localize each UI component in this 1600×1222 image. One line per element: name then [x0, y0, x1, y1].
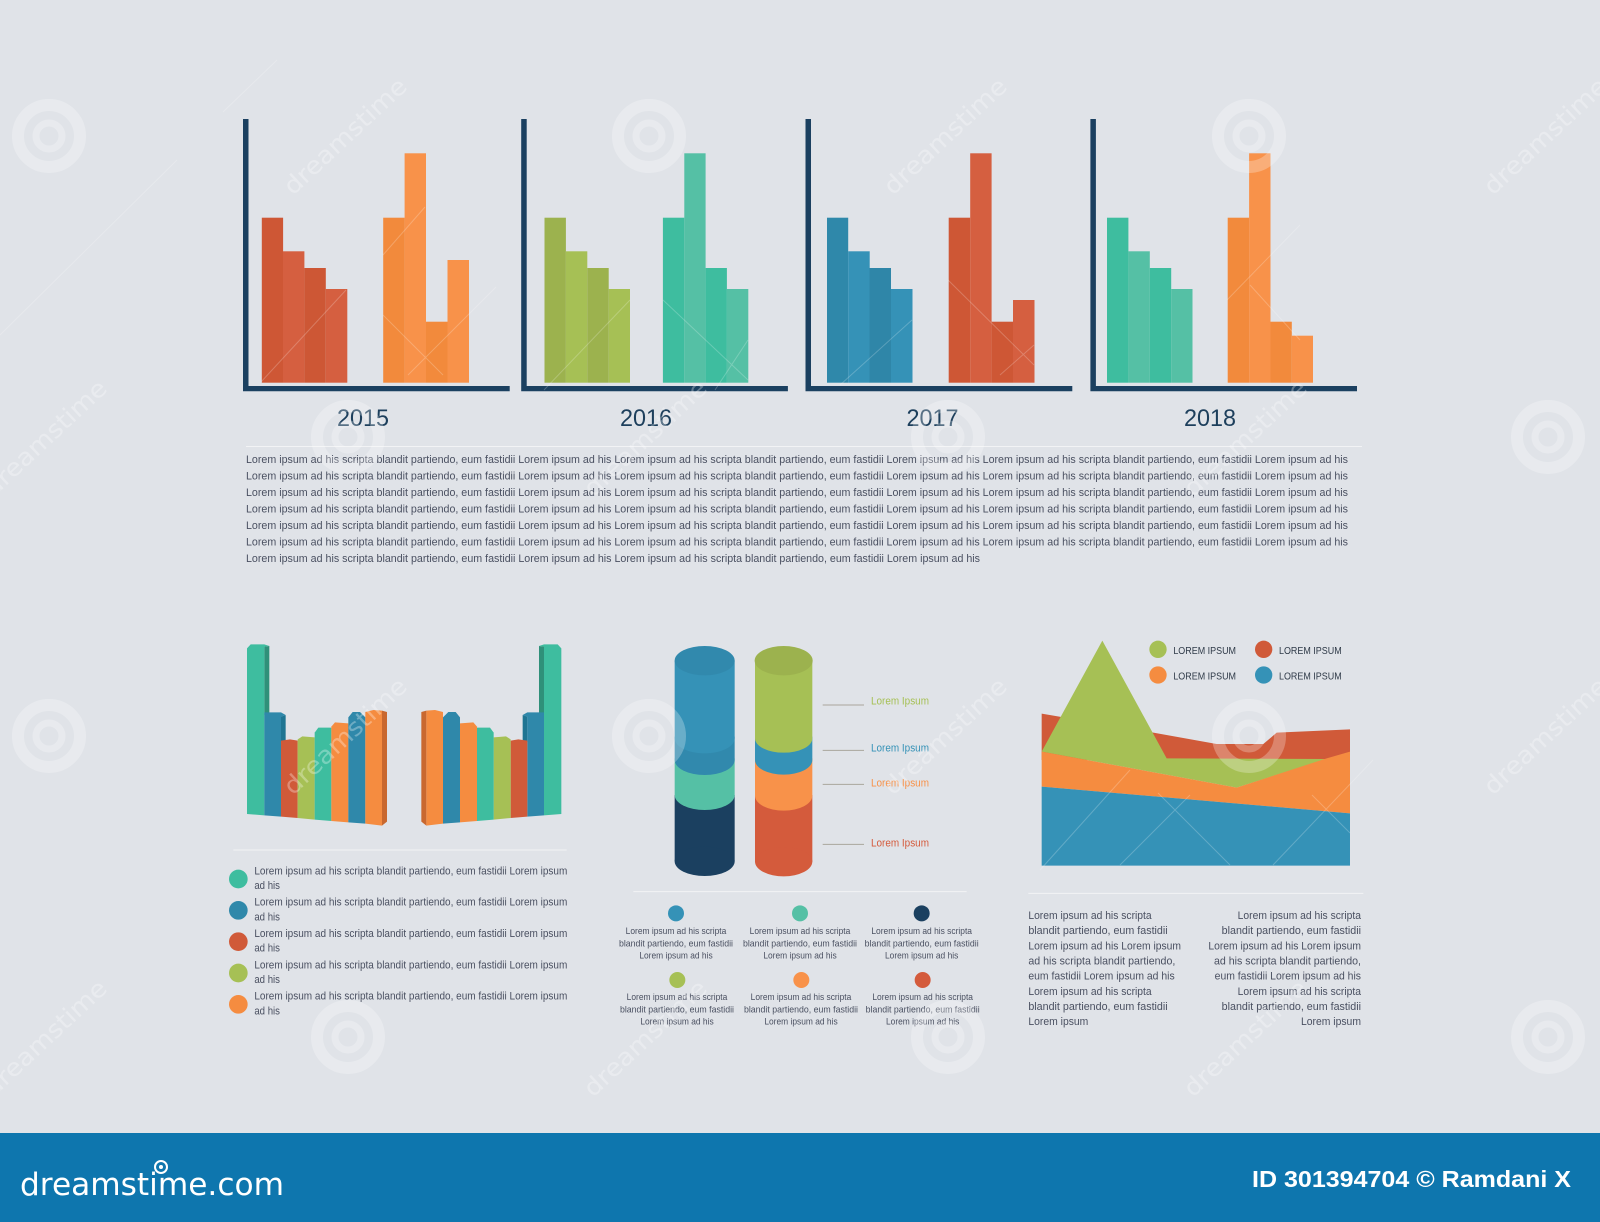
bars 2015 group two — [383, 153, 469, 383]
legend: cylinder items: blandit partiendo, eum fastidii — [865, 938, 979, 948]
area chart legend: LOREM IPSUM — [1173, 671, 1236, 682]
area chart legend — [1149, 641, 1342, 684]
legend: 3D bars: ad his — [254, 974, 280, 986]
left cylinder stack — [675, 646, 735, 876]
text block: main paragraph: Lorem ipsum ad his scripta blandit partiendo, eum fastidii Lorem ipsum ad his Lorem ipsum ad his scripta blandit partiendo, eum fastidii Lorem ipsum ad his Lorem ipsum ad his scripta blandit partiendo, eum fastidii Lorem ipsum ad his — [246, 520, 1348, 532]
text block: main paragraph: Lorem ipsum ad his scripta blandit partiendo, eum fastidii Lorem ipsum ad his Lorem ipsum ad his scripta blandit partiendo, eum fastidii Lorem ipsum ad his — [246, 553, 980, 565]
legend: cylinder items: Lorem ipsum ad his — [885, 951, 959, 961]
text block: right column: ad his scripta blandit partiendo, — [1214, 956, 1361, 968]
callout: red label: Lorem Ipsum — [871, 837, 929, 849]
text block: left column: Lorem ipsum ad his scripta — [1028, 986, 1152, 998]
text block: left column: blandit partiendo, eum fastidii — [1028, 925, 1168, 937]
bars 2018 group one — [1107, 218, 1192, 383]
text block: left column — [1028, 910, 1181, 1028]
text block: left column: Lorem ipsum ad his Lorem ipsum — [1028, 940, 1181, 952]
bars 2017 group two — [949, 153, 1034, 383]
watermark overlay: dreamstime — [1178, 374, 1313, 502]
legend: cylinder items: Lorem ipsum ad his scripta — [750, 926, 851, 936]
text block: main paragraph: Lorem ipsum ad his scripta blandit partiendo, eum fastidii Lorem ipsum ad his Lorem ipsum ad his scripta blandit partiendo, eum fastidii Lorem ipsum ad his Lorem ipsum ad his scripta blandit partiendo, eum fastidii Lorem ipsum ad his — [246, 454, 1348, 466]
text block: left column: blandit partiendo, eum fastidii — [1028, 1001, 1168, 1013]
legend: cylinder items — [619, 905, 980, 1027]
footer credit: ID 301394704 © Ramdani X — [1252, 1166, 1572, 1192]
callout: green label — [823, 695, 929, 707]
legend: 3D bars — [229, 865, 567, 1017]
legend: cylinder items: blandit partiendo, eum fastidii — [744, 1004, 858, 1014]
legend: cylinder items: Lorem ipsum ad his — [639, 951, 713, 961]
legend: 3D bars: Lorem ipsum ad his scripta blandit partiendo, eum fastidii Lorem ipsum — [254, 928, 567, 940]
footer bar — [0, 1133, 1600, 1222]
panel: stacked cylinder chart — [619, 646, 980, 1027]
legend: cylinder items: Lorem ipsum ad his — [640, 1017, 714, 1027]
area chart legend: LOREM IPSUM — [1279, 671, 1342, 682]
text block: main paragraph: Lorem ipsum ad his scripta blandit partiendo, eum fastidii Lorem ipsum ad his Lorem ipsum ad his scripta blandit partiendo, eum fastidii Lorem ipsum ad his Lorem ipsum ad his scripta blandit partiendo, eum fastidii Lorem ipsum ad his — [246, 536, 1348, 548]
text block: left column: ad his scripta blandit partiendo, — [1028, 956, 1175, 968]
watermark overlay: dreamstime — [278, 72, 413, 200]
legend: cylinder items: Lorem ipsum ad his — [763, 951, 837, 961]
legend: 3D bars: Lorem ipsum ad his scripta blandit partiendo, eum fastidii Lorem ipsum — [254, 897, 567, 909]
legend: 3D bars: ad his — [254, 911, 280, 923]
panel: bar chart 2018 — [1090, 119, 1357, 432]
legend: cylinder items: Lorem ipsum ad his scripta — [751, 992, 852, 1002]
area chart legend: LOREM IPSUM — [1279, 646, 1342, 657]
legend: cylinder items: Lorem ipsum ad his scripta — [871, 926, 973, 936]
year label 2017: 2017 — [906, 405, 958, 432]
axes 2016 — [521, 119, 788, 391]
watermark overlay: dreamstime — [878, 72, 1013, 200]
axes 2017 — [806, 119, 1072, 391]
legend: cylinder items: blandit partiendo, eum fastidii — [743, 938, 857, 948]
watermark overlay: dreamstime — [1178, 974, 1313, 1102]
legend: 3D bars: Lorem ipsum ad his scripta blandit partiendo, eum fastidii Lorem ipsum — [254, 865, 567, 877]
legend: 3D bars: ad his — [254, 880, 280, 892]
watermark overlay: dreamstime — [578, 374, 713, 502]
text block: right column: Lorem ipsum ad his scripta — [1238, 986, 1361, 998]
year label 2015: 2015 — [337, 405, 389, 432]
panel: bar chart 2017 — [806, 119, 1072, 432]
callout: green label: Lorem Ipsum — [871, 695, 929, 707]
text block: main paragraph: Lorem ipsum ad his scripta blandit partiendo, eum fastidii Lorem ipsum ad his Lorem ipsum ad his scripta blandit partiendo, eum fastidii Lorem ipsum ad his Lorem ipsum ad his scripta blandit partiendo, eum fastidii Lorem ipsum ad his — [246, 487, 1348, 499]
legend: cylinder items: Lorem ipsum ad his scripta — [872, 992, 974, 1002]
legend: cylinder items: Lorem ipsum ad his scripta — [627, 992, 728, 1002]
bars 2017 group one — [827, 218, 912, 383]
area chart shapes — [1042, 641, 1350, 866]
legend: cylinder items: blandit partiendo, eum fastidii — [866, 1004, 980, 1014]
text block: main paragraph: Lorem ipsum ad his scripta blandit partiendo, eum fastidii Lorem ipsum ad his Lorem ipsum ad his scripta blandit partiendo, eum fastidii Lorem ipsum ad his Lorem ipsum ad his scripta blandit partiendo, eum fastidii Lorem ipsum ad his — [246, 504, 1348, 516]
legend: 3D bars: Lorem ipsum ad his scripta blandit partiendo, eum fastidii Lorem ipsum — [254, 959, 567, 971]
panel: bar chart 2016 — [521, 119, 788, 432]
text block: left column: Lorem ipsum — [1028, 1016, 1088, 1028]
text block: right column: blandit partiendo, eum fastidii — [1222, 925, 1361, 937]
text block: right column: blandit partiendo, eum fastidii — [1222, 1001, 1361, 1013]
watermark overlay: dreamstime — [878, 672, 1013, 800]
text block: left column: eum fastidii Lorem ipsum ad his — [1028, 971, 1175, 983]
panel: bar chart 2015 — [243, 119, 510, 432]
text block: right column: eum fastidii Lorem ipsum ad his — [1215, 971, 1361, 983]
watermark overlay: dreamstime — [278, 672, 413, 800]
3D bars right group — [421, 644, 561, 826]
text block: main paragraph: Lorem ipsum ad his scripta blandit partiendo, eum fastidii Lorem ipsum ad his Lorem ipsum ad his scripta blandit partiendo, eum fastidii Lorem ipsum ad his Lorem ipsum ad his scripta blandit partiendo, eum fastidii Lorem ipsum ad his — [246, 470, 1348, 482]
legend: 3D bars: ad his — [254, 943, 280, 955]
watermark overlay: dreamstime — [578, 974, 713, 1102]
legend: cylinder items: Lorem ipsum ad his scripta — [626, 926, 727, 936]
panel: area chart — [1028, 641, 1363, 1028]
text block: right column: Lorem ipsum ad his Lorem ipsum — [1208, 940, 1361, 952]
bars 2016 group one — [544, 218, 630, 383]
callout: blue label: Lorem Ipsum — [871, 742, 929, 754]
legend: cylinder items: Lorem ipsum ad his — [764, 1017, 838, 1027]
text block: main paragraph — [246, 446, 1362, 565]
bars 2016 group two — [663, 153, 748, 383]
text block: right column: Lorem ipsum ad his scripta — [1238, 910, 1361, 922]
legend: cylinder items: Lorem ipsum ad his — [886, 1017, 960, 1027]
legend: 3D bars: Lorem ipsum ad his scripta blandit partiendo, eum fastidii Lorem ipsum — [254, 991, 567, 1003]
right cylinder stack — [755, 646, 813, 876]
text block: right column: Lorem ipsum — [1301, 1016, 1361, 1028]
panel: 3D bar chart — [229, 644, 567, 1017]
legend: 3D bars: ad his — [254, 1005, 280, 1017]
callout: orange label: Lorem Ipsum — [871, 777, 929, 789]
watermark overlay: dreamstime — [1478, 72, 1600, 200]
year label 2018: 2018 — [1184, 405, 1236, 432]
watermark overlay: dreamstime — [1478, 672, 1600, 800]
axes 2018 — [1090, 119, 1357, 391]
text block: right column — [1208, 910, 1361, 1028]
text block: left column: Lorem ipsum ad his scripta — [1028, 910, 1152, 922]
legend: cylinder items: blandit partiendo, eum fastidii — [619, 938, 733, 948]
legend: cylinder items: blandit partiendo, eum fastidii — [620, 1004, 734, 1014]
callout: red label — [823, 837, 929, 849]
bars 2018 group two — [1228, 153, 1313, 383]
year label 2016: 2016 — [620, 405, 672, 432]
callout: orange label — [823, 777, 929, 789]
area chart legend: LOREM IPSUM — [1173, 646, 1236, 657]
bars 2015 group one — [262, 218, 347, 383]
callout: blue label — [823, 742, 929, 754]
axes 2015 — [243, 119, 510, 391]
footer logo: dreamstime.com — [20, 1167, 284, 1203]
3D bars left group — [247, 644, 387, 826]
